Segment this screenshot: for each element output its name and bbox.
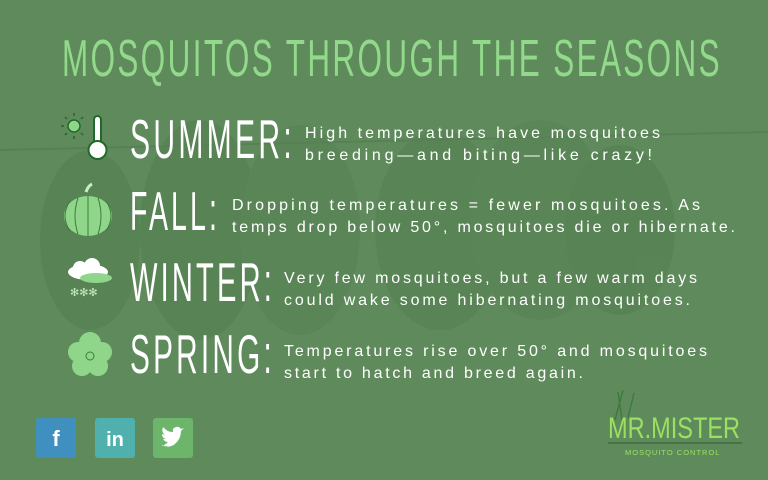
logo: Mr. Mister xyxy=(608,390,742,457)
icon: summer sun and thermometer xyxy=(61,113,106,159)
text: fall: temps drop below 50°, mosquitoes die or hibernate. xyxy=(232,219,735,236)
text: winter: could wake some hibernating mosquitoes. xyxy=(284,292,690,309)
icon: flower xyxy=(68,332,112,376)
heading: fall: FALL: xyxy=(130,180,220,242)
text: winter: Very few mosquitoes, but a few warm days xyxy=(284,270,697,287)
icon: pumpkin xyxy=(64,184,112,236)
text: summer: breeding—and biting—like crazy! xyxy=(305,147,652,164)
icon: snow cloud xyxy=(68,258,112,299)
text: fall: Dropping temperatures = fewer mosquitoes. As xyxy=(232,197,700,214)
text: spring: Temperatures rise over 50° and mosquitoes xyxy=(284,343,707,360)
icon: facebook xyxy=(36,418,76,458)
icon: linkedin xyxy=(95,418,135,458)
heading: winter: WINTER: xyxy=(130,251,275,313)
icon: twitter xyxy=(153,418,193,458)
text: spring: start to hatch and breed again. xyxy=(284,365,583,382)
icon: facebook: f xyxy=(52,426,60,451)
heading: summer: SUMMER: xyxy=(130,108,295,170)
icon: linkedin: in xyxy=(106,429,124,451)
background leaves xyxy=(0,120,768,340)
icon: snow cloud: ✻✻✻ xyxy=(70,287,98,299)
logo: Mr. Mister: MOSQUITO CONTROL xyxy=(625,448,720,457)
heading: spring: SPRING: xyxy=(130,323,275,385)
text: summer: High temperatures have mosquitoes xyxy=(305,125,660,142)
